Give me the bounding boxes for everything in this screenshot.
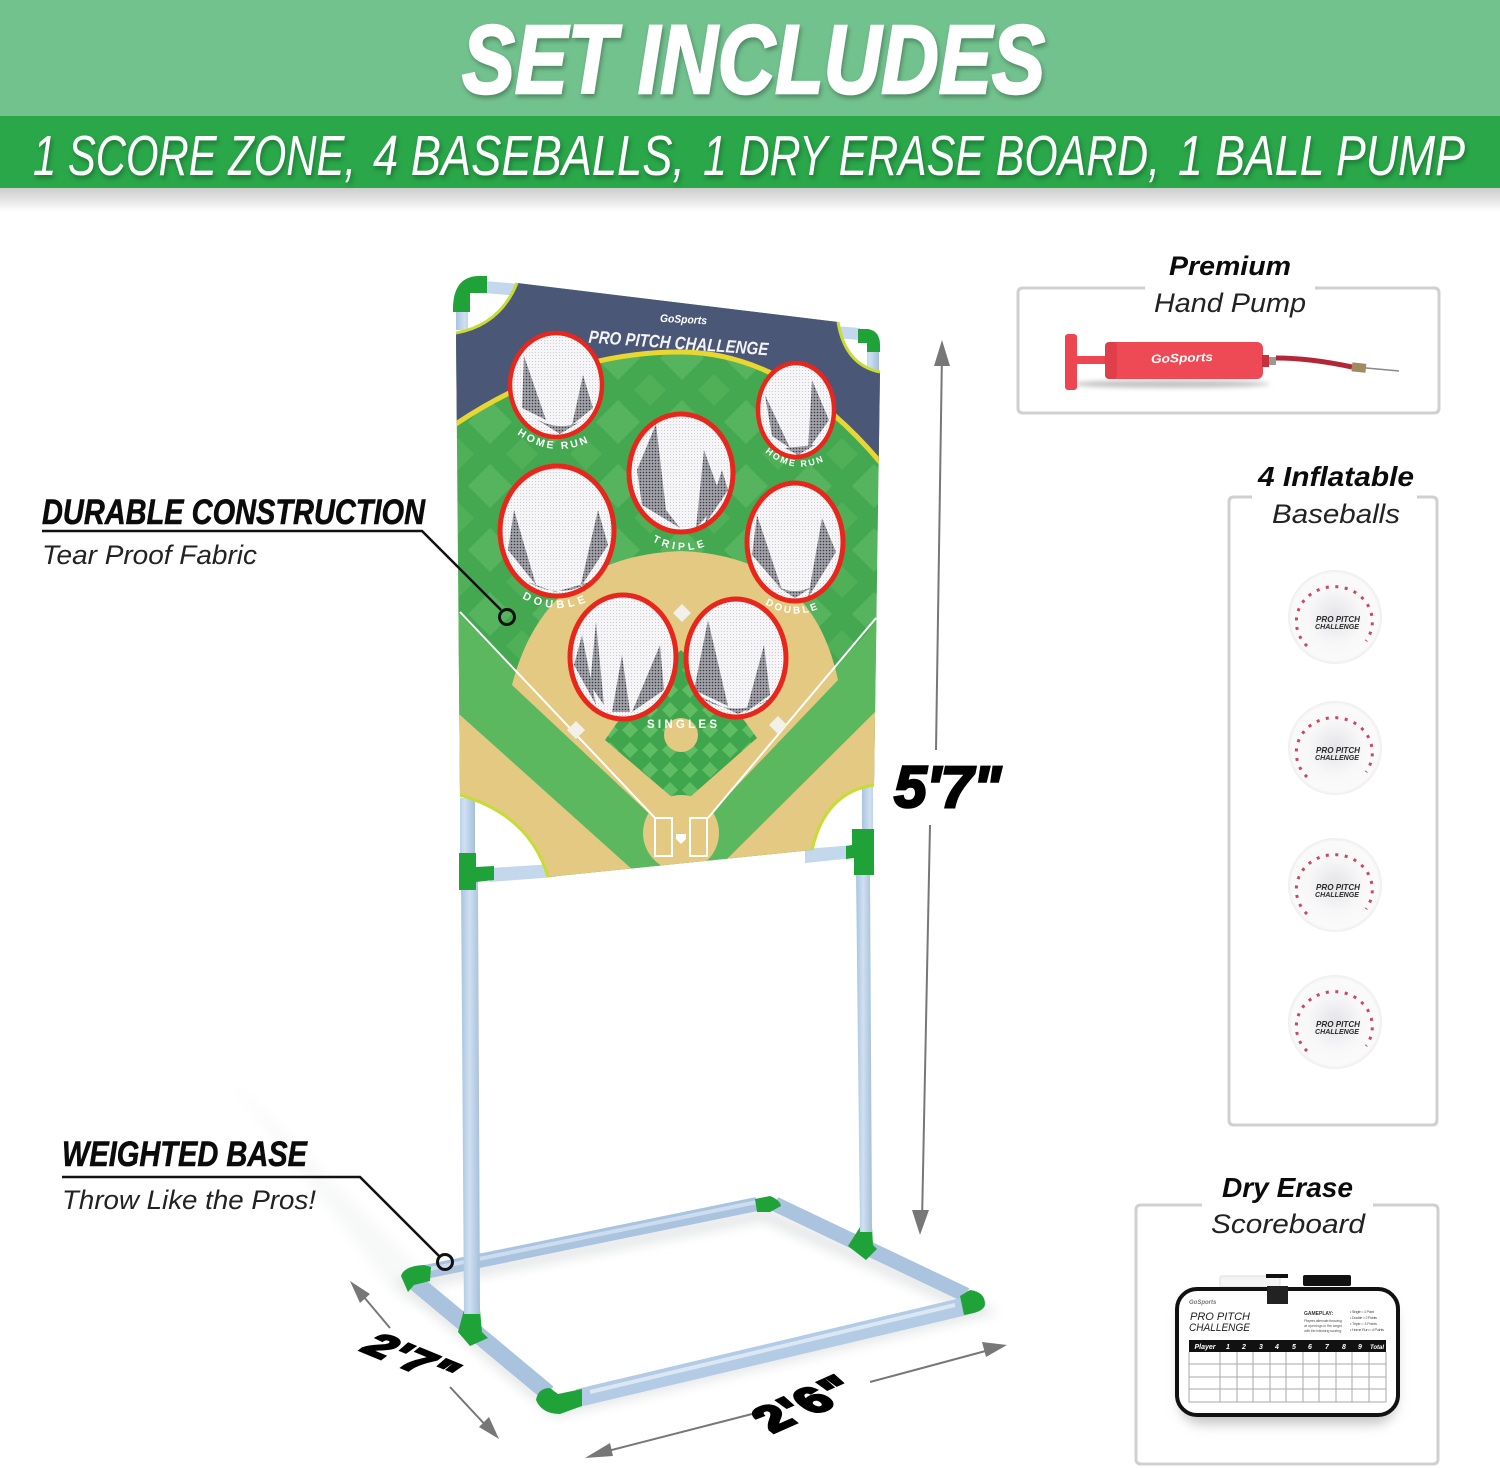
icon: dry erase board: Total [1370,1345,1384,1351]
target: double right [747,483,843,601]
icon: baseball 2 [1288,701,1382,795]
target: single right [686,599,786,717]
fabric banner [456,282,880,878]
icon: dry erase board: 9 [1358,1344,1362,1351]
panel: scoreboard [1136,1172,1438,1464]
target labels: HOME RUN [518,428,588,450]
dimension: depth 2'7": 2'7" [351,1328,472,1391]
icon: dry erase board: GoSports [1189,1300,1217,1306]
title: SET [462,5,622,114]
icon: dry erase board: 7 [1325,1344,1330,1351]
icon: dry erase board: 8 [1342,1344,1346,1351]
icon: dry erase board: • Home Run = 4 Points [1350,1327,1384,1332]
target labels [518,428,823,731]
icon: baseball 2: CHALLENGE [1315,753,1360,762]
icon: dry erase board: 6 [1308,1344,1312,1351]
icon: dry erase board: PRO PITCH [1190,1311,1250,1323]
panel: baseballs [1229,461,1437,1125]
icon: dry erase board: 4 [1274,1344,1279,1351]
icon: baseball 3 [1288,838,1382,932]
icon: dry erase board: 1 [1226,1344,1230,1351]
icon: dry erase board: with the following scoring: [1304,1328,1342,1333]
icon: dry erase board: 2 [1241,1344,1246,1351]
callout: weighted base: WEIGHTED BASE [62,1135,308,1174]
callout: durable construction [42,493,514,624]
icon: dry erase board: • Double = 2 Points [1350,1315,1377,1320]
subtitle: 4 BASEBALLS, [373,124,685,188]
heading: Premium [1169,251,1291,281]
icon: red pump: GoSports [1151,350,1214,366]
title: INCLUDES [638,5,1045,114]
dimension: width 2'6" [585,1342,1007,1458]
icon: dry erase board: • Single = 1 Point [1350,1309,1375,1314]
icon: dry erase board [1177,1274,1398,1424]
target labels: HOME RUN [766,448,823,467]
game title: PRO PITCH CHALLENGE [588,327,770,359]
target labels: TRIPLE [654,534,704,550]
brand logo: GoSports [660,313,707,327]
target: home run left [510,333,602,437]
icon: baseball 3: CHALLENGE [1315,890,1360,899]
target labels: DOUBLE [522,592,586,608]
base frame [401,1196,985,1414]
icon: dry erase board: GAMEPLAY: [1304,1311,1334,1317]
icon: baseball 1: PRO PITCH [1316,614,1361,624]
subtitle: 1 DRY ERASE BOARD, [703,124,1160,188]
icon: dry erase board: Players alternate throwing [1304,1318,1342,1323]
target labels: SINGLES [647,719,717,731]
target: single left [570,595,676,719]
icon: dry erase board: Player [1194,1344,1217,1351]
callout: weighted base [62,1135,452,1270]
heading: Dry Erase [1222,1172,1353,1203]
icon: dry erase board: CHALLENGE [1189,1322,1251,1334]
icon: dry erase board: 5 [1292,1344,1296,1351]
subheading: Scoreboard [1211,1209,1366,1239]
callout: weighted base: Throw Like the Pros! [62,1185,317,1215]
heading: 4 Inflatable [1257,461,1414,492]
poles [453,276,880,1314]
subheading: Baseballs [1272,499,1400,529]
subtitle: 1 SCORE ZONE, [33,124,356,188]
subtitle [33,124,1465,188]
dimension: height 5'7": 5'7" [894,755,1003,820]
icon: baseball 4 [1288,975,1382,1069]
icon: dry erase board: at openings in the target [1304,1323,1343,1328]
floor shadow [230,1080,470,1320]
target: triple [629,414,733,532]
icon: baseball 1: CHALLENGE [1315,622,1360,631]
panel: hand pump [1018,251,1439,413]
title [462,5,1045,114]
icon: red pump [1065,334,1399,390]
product: pitch target on frame [372,276,992,1446]
dimension: height 5'7" [894,340,1003,1235]
dimension: width 2'6": 2'6" [741,1368,871,1440]
target: double left [500,466,614,596]
subheading: Hand Pump [1154,288,1306,318]
icon: dry erase board: • Triple = 3 Points [1350,1321,1377,1326]
icon: baseball 3: PRO PITCH [1316,882,1361,892]
icon: baseball 4: PRO PITCH [1316,1019,1361,1029]
dimension: depth 2'7" [350,1281,499,1439]
target labels: DOUBLE [766,598,818,614]
callout: durable construction: DURABLE CONSTRUCTION [42,493,426,532]
header banner [0,0,1500,212]
icon: baseball 4: CHALLENGE [1315,1027,1360,1036]
icon: baseball 2: PRO PITCH [1316,745,1361,755]
target: home run right [758,363,834,457]
icon: baseball 1 [1288,570,1382,664]
callout: durable construction: Tear Proof Fabric [42,540,258,570]
icon: dry erase board: 3 [1259,1344,1263,1351]
